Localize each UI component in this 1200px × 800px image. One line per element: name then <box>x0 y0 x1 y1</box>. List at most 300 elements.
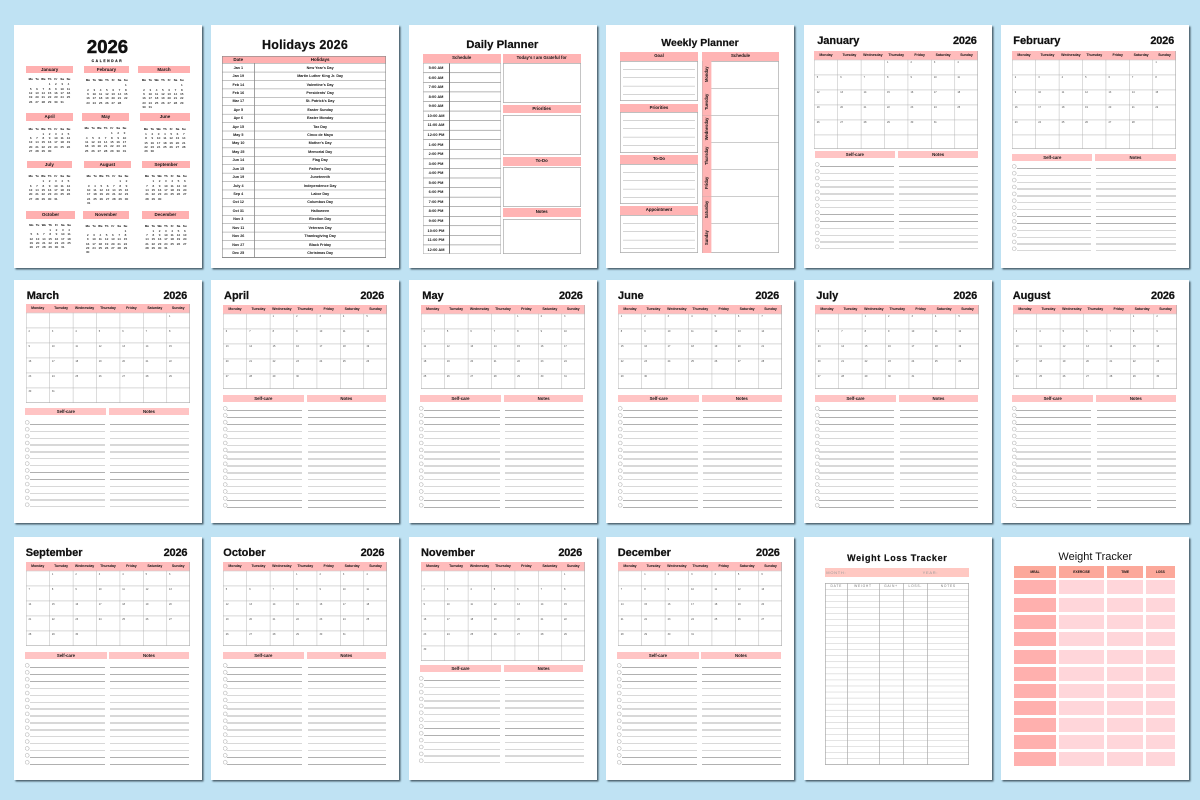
calendar grid: 7 <box>249 330 251 333</box>
calendar grid: 20 <box>1086 360 1089 363</box>
mini calendar: January: 11 <box>67 87 70 91</box>
column label: gain: GAIN+ <box>884 584 898 588</box>
mini calendar: June: Su <box>182 127 186 131</box>
calendar grid: 13 <box>840 91 843 94</box>
calendar grid: 12 <box>714 330 717 333</box>
calendar grid: 20 <box>226 360 229 363</box>
mini calendar: December: Tu <box>152 224 155 228</box>
mini calendar: October: Tu <box>36 223 39 227</box>
mini calendar: July: 24 <box>54 192 58 196</box>
calendar grid: 23 <box>1015 121 1018 124</box>
mini calendar: April: We <box>41 126 45 130</box>
mini calendar: May: 31 <box>123 149 126 153</box>
table: holidays list: Holidays <box>311 57 330 62</box>
calendar grid: 3 <box>1016 330 1017 333</box>
month label: March: March <box>157 67 171 72</box>
section header: priorities <box>620 104 698 112</box>
calendar grid: 26 <box>1063 375 1065 378</box>
calendar grid: 27 <box>169 618 172 621</box>
month label: February: February <box>97 67 116 72</box>
mini calendar: February: We <box>98 78 103 82</box>
mini calendar: November: 17 <box>92 242 96 246</box>
mini calendar: May: 21 <box>104 144 107 148</box>
calendar grid: Monday <box>31 564 44 568</box>
month and year bar: MONTH: <box>826 570 846 575</box>
mini calendar: January: Tu <box>35 77 39 81</box>
calendar grid: 8 <box>1155 76 1157 79</box>
mini calendar: November: 29 <box>124 246 127 250</box>
mini calendar: December: 31 <box>164 246 168 250</box>
calendar grid: 12 <box>146 588 148 591</box>
mini calendar: March: Mo <box>142 78 146 82</box>
calendar grid: Saturday <box>1135 307 1150 311</box>
mini calendar: August: 28 <box>112 197 116 201</box>
column label: loss: LOSS- <box>908 584 922 588</box>
day label: Sunday <box>702 223 712 253</box>
mini calendar: November: Fr <box>111 224 114 228</box>
section header: self-care: Self-care <box>57 409 75 414</box>
year: 2026 <box>755 290 779 302</box>
calendar grid: 18 <box>75 360 78 363</box>
table: holidays list: Martin Luther King Jr. Day <box>297 74 343 78</box>
mini calendar: September: 2 <box>159 179 160 183</box>
month label: July <box>27 161 72 168</box>
mini calendar: October: 3 <box>62 228 64 232</box>
calendar grid: 28 <box>841 375 844 378</box>
calendar grid: 20 <box>169 603 172 606</box>
mini calendar: August: 1 <box>119 179 121 183</box>
mini calendar: September: Th <box>164 174 168 178</box>
mini calendar: January: Sa <box>60 77 64 81</box>
month title: February <box>1013 35 1060 47</box>
calendar grid: 7 <box>273 588 274 591</box>
calendar grid: Saturday <box>936 53 951 57</box>
month label: June <box>140 113 190 121</box>
calendar grid: 16 <box>296 345 299 348</box>
mini calendar: January: 22 <box>48 95 51 99</box>
calendar grid: 25 <box>691 360 694 363</box>
calendar grid: 27 <box>470 375 473 378</box>
mini calendar: October: We <box>42 223 46 227</box>
calendar grid: 29 <box>564 633 567 636</box>
calendar grid: 31 <box>343 633 346 636</box>
mini calendar: August: Fr <box>112 174 115 178</box>
mini calendar: February: 21 <box>118 96 121 100</box>
mini calendar: April: 4 <box>61 132 63 136</box>
month label: November: November <box>95 212 117 217</box>
mini calendar: November: 12 <box>105 237 108 241</box>
mini calendar: April: 21 <box>35 145 39 149</box>
mini calendar: June: Fr <box>170 127 173 131</box>
calendar grid <box>814 51 978 149</box>
mini calendar: July: 22 <box>42 192 45 196</box>
calendar grid: Thursday <box>692 307 708 311</box>
mini calendar: September: 5 <box>178 179 179 183</box>
calendar grid: 23 <box>888 360 891 363</box>
mini calendar: January: 10 <box>60 87 64 91</box>
calendar grid: 15 <box>273 345 275 348</box>
section header: self-care <box>815 151 895 158</box>
mini calendar: March: 25 <box>155 101 158 105</box>
mini calendar: October: 1 <box>49 228 51 232</box>
mini calendar: March: 12 <box>161 92 165 96</box>
mini calendar: November: 4 <box>99 233 101 237</box>
calendar grid: Wednesday <box>272 564 292 568</box>
section header: notes <box>899 395 978 402</box>
table: holidays list <box>222 56 386 258</box>
mini calendar: November: Th <box>105 224 108 228</box>
mini calendar: January <box>28 77 70 104</box>
mini calendar: July: Tu <box>35 174 39 178</box>
mini calendar: July: 1 <box>42 179 44 183</box>
mini calendar: October: 29 <box>48 245 52 249</box>
calendar grid: 13 <box>1086 345 1089 348</box>
mini calendar: October: Mo <box>29 223 33 227</box>
calendar grid: 1 <box>887 61 888 64</box>
mini calendar: November: 28 <box>118 246 121 250</box>
mini calendar: November: Mo <box>86 224 90 228</box>
mini calendar: February: 14 <box>118 92 121 96</box>
calendar grid: 9 <box>296 330 297 333</box>
calendar grid: 20 <box>517 618 520 621</box>
calendar grid: 2 <box>319 573 321 576</box>
mini calendar: July: 28 <box>35 197 39 201</box>
mini calendar: January: 3 <box>61 82 63 86</box>
mini calendar: August: 25 <box>93 197 97 201</box>
mini calendar: June: 20 <box>176 141 179 145</box>
mini calendar: April: 15 <box>42 140 45 144</box>
calendar grid: 25 <box>957 106 960 109</box>
table: holidays list: Flag Day <box>312 158 328 162</box>
mini calendar: October: 23 <box>55 241 58 245</box>
mini calendar: May: 1 <box>111 131 113 135</box>
section header: notes <box>109 408 189 415</box>
month and year bar: YEAR: <box>923 570 938 575</box>
calendar grid: 16 <box>668 603 670 606</box>
mini calendar: March: 29 <box>180 101 183 105</box>
mini calendar: June: 16 <box>151 141 154 145</box>
calendar grid: 25 <box>935 360 938 363</box>
month label: September: September <box>154 162 178 167</box>
calendar grid: 20 <box>249 618 252 621</box>
calendar grid: 27 <box>517 633 520 636</box>
mini calendar: March: 13 <box>168 92 171 96</box>
calendar grid: Monday <box>228 307 242 311</box>
section header: self-care <box>420 665 501 672</box>
calendar grid: 26 <box>99 375 102 378</box>
calendar grid: 21 <box>146 360 148 363</box>
mini calendar: December: 8 <box>152 233 154 237</box>
calendar grid: 22 <box>169 360 172 363</box>
mini calendar: April: 7 <box>36 136 38 140</box>
calendar grid: 21 <box>494 360 497 363</box>
mini calendar: June: 22 <box>144 145 148 149</box>
mini calendar: August: 14 <box>112 188 116 192</box>
mini calendar: December: 30 <box>158 246 161 250</box>
notes lines <box>505 404 584 508</box>
month and year bar <box>825 568 969 577</box>
column header: time <box>1107 566 1143 578</box>
mini calendar: August: 9 <box>126 184 127 188</box>
year: 2026 <box>558 547 582 559</box>
calendar grid: Thursday <box>297 307 313 311</box>
mini calendar: December: 19 <box>177 237 180 241</box>
calendar grid: 1 <box>865 315 866 318</box>
calendar grid: 4 <box>1039 330 1041 333</box>
schedule time rows: 4:00 PM <box>429 170 443 175</box>
notes lines <box>110 418 189 507</box>
calendar grid: 5 <box>714 315 716 318</box>
mini calendar: July <box>28 174 70 201</box>
mini calendar: September: 27 <box>183 192 186 196</box>
calendar grid: 6 <box>738 315 739 318</box>
mini calendar: April: Mo <box>29 126 33 130</box>
calendar grid: Monday <box>426 307 439 311</box>
section header: notes: Notes <box>1130 396 1142 401</box>
section header: notes <box>109 652 189 659</box>
mini calendar: May: 15 <box>110 140 114 144</box>
mini calendar: December: 17 <box>164 237 168 241</box>
mini calendar: February: 17 <box>93 96 96 100</box>
mini calendar: October: 9 <box>56 232 57 236</box>
mini calendar: September: 26 <box>177 192 180 196</box>
section header: notes: Notes <box>340 396 352 401</box>
year: 2026 <box>163 290 187 302</box>
calendar grid: Monday <box>228 564 242 568</box>
calendar grid: 17 <box>99 603 102 606</box>
calendar grid: 24 <box>99 618 102 621</box>
mini calendar: February: 12 <box>105 92 109 96</box>
mini calendar: May: 2 <box>117 131 119 135</box>
calendar grid <box>618 562 782 646</box>
section header: notes <box>1095 154 1176 161</box>
calendar grid: 25 <box>470 633 473 636</box>
calendar grid: 1 <box>621 315 622 318</box>
section header: notes: Notes <box>536 209 548 214</box>
table: holidays list: Easter Monday <box>307 116 333 120</box>
mini calendar: April: Fr <box>54 126 57 130</box>
mini calendar: September: Tu <box>152 174 155 178</box>
table: holidays list: St. Patrick's Day <box>306 99 335 103</box>
calendar grid: 17 <box>319 345 322 348</box>
mini calendar: March: 19 <box>161 96 165 100</box>
section header: grateful: Today's I am Grateful for <box>517 55 567 60</box>
calendar grid: 8 <box>865 330 866 333</box>
calendar grid: Friday <box>521 307 532 311</box>
calendar grid: 7 <box>541 588 542 591</box>
calendar grid <box>26 562 190 646</box>
calendar grid <box>1012 51 1176 149</box>
column label: weight: WEIGHT <box>854 584 872 588</box>
mini calendar: December: 22 <box>152 242 155 246</box>
calendar grid: 12 <box>99 345 102 348</box>
calendar grid: 30 <box>644 375 647 378</box>
mini calendar: June: 30 <box>151 149 154 153</box>
mini calendar: January: 31 <box>60 100 64 104</box>
calendar grid: 12 <box>738 588 741 591</box>
calendar grid: Wednesday <box>864 307 884 311</box>
calendar grid: 27 <box>761 618 764 621</box>
calendar grid: 21 <box>864 106 866 109</box>
mini calendar: January: 6 <box>36 87 38 91</box>
calendar grid: 15 <box>621 345 624 348</box>
section header: self-care <box>1012 395 1093 402</box>
calendar grid: 5 <box>958 315 960 318</box>
calendar grid: 13 <box>169 588 172 591</box>
mini calendar: October: 15 <box>48 237 52 241</box>
mini calendar: January: 1 <box>49 82 50 86</box>
table: holidays list: Thanksgiving Day <box>304 234 336 238</box>
year: 2026 <box>953 35 977 47</box>
mini calendar: April: 2 <box>49 132 50 136</box>
mini calendar: August: 23 <box>125 192 128 196</box>
mini calendar: December: 15 <box>152 237 155 241</box>
mini calendar: June: 2 <box>151 132 153 136</box>
mini calendar: December: 24 <box>164 242 168 246</box>
mini calendar: November: 25 <box>99 246 102 250</box>
calendar grid: 19 <box>714 345 717 348</box>
schedule time rows: 5:00 PM <box>429 180 443 185</box>
table: holidays list: Independence Day <box>304 184 336 188</box>
mini calendar: June: 28 <box>182 145 185 149</box>
calendar grid: 7 <box>864 76 865 79</box>
mini calendar: February: 23 <box>86 101 90 105</box>
calendar grid: 25 <box>714 618 717 621</box>
section header: appointment <box>620 206 698 215</box>
mini calendar: November: 5 <box>106 233 107 237</box>
calendar grid: 7 <box>841 330 843 333</box>
calendar grid <box>223 562 387 646</box>
mini calendar: August: 29 <box>118 197 122 201</box>
calendar grid: 9 <box>1156 330 1158 333</box>
mini calendar: March: 7 <box>175 88 176 92</box>
calendar grid: Tuesday <box>251 307 265 311</box>
calendar grid: 2 <box>1156 315 1158 318</box>
mini calendar: November: 30 <box>86 250 89 254</box>
section header: notes <box>1096 395 1176 402</box>
box: notes <box>503 219 581 254</box>
column label: notes: NOTES <box>941 584 956 588</box>
mini calendar: July: 4 <box>61 179 63 183</box>
schedule time rows: 11:00 PM <box>428 237 444 242</box>
month title: September <box>26 547 83 559</box>
calendar grid: 11 <box>470 603 473 606</box>
calendar grid: Thursday <box>889 307 905 311</box>
mini calendar: October: 7 <box>43 232 45 236</box>
mini calendar: August: Tu <box>93 174 97 178</box>
calendar grid: 8 <box>273 330 274 333</box>
calendar grid: 1 <box>564 573 565 576</box>
calendar grid: 16 <box>541 345 543 348</box>
calendar grid: 18 <box>957 91 960 94</box>
calendar grid: 22 <box>644 618 647 621</box>
calendar grid: 21 <box>28 618 31 621</box>
month title: June <box>618 290 644 302</box>
mini calendar: January: 18 <box>67 91 70 95</box>
calendar grid: 20 <box>840 106 843 109</box>
table: holidays list: Dec 25 <box>232 251 244 255</box>
mini calendar: April: 29 <box>42 149 45 153</box>
calendar grid: 24 <box>911 360 914 363</box>
calendar grid: 6 <box>1086 330 1087 333</box>
mini calendar: July: 31 <box>54 197 58 201</box>
mini calendar: January: 19 <box>29 95 32 99</box>
calendar grid: 24 <box>1038 121 1041 124</box>
calendar grid: 3 <box>447 588 448 591</box>
calendar grid: Tuesday <box>251 564 265 568</box>
section header: to-do: To-Do <box>653 156 665 161</box>
calendar grid: 15 <box>1155 91 1158 94</box>
mini calendar: March: 2 <box>143 88 145 92</box>
mini calendar: March: 16 <box>142 96 146 100</box>
self-care checklist <box>223 661 303 765</box>
mini calendar: September: 25 <box>170 192 174 196</box>
calendar grid: 12 <box>1085 91 1088 94</box>
table grid <box>825 583 969 765</box>
mini calendar: March: 5 <box>162 88 164 92</box>
mini calendar: March: 8 <box>181 88 183 92</box>
calendar grid: 8 <box>296 588 297 591</box>
calendar grid: 16 <box>910 91 913 94</box>
calendar grid: 13 <box>249 603 252 606</box>
calendar grid: 24 <box>564 360 567 363</box>
self-care checklist <box>223 404 303 508</box>
calendar grid: 25 <box>1039 375 1042 378</box>
mini calendar: October: Fr <box>55 223 58 227</box>
calendar grid: 1 <box>273 315 274 318</box>
calendar grid: 30 <box>541 375 543 378</box>
mini calendar: December: 10 <box>164 233 168 237</box>
mini calendar: March: 28 <box>174 101 177 105</box>
mini calendar: July: 14 <box>35 188 39 192</box>
section header: self-care: Self-care <box>650 396 668 401</box>
calendar grid: 20 <box>761 603 764 606</box>
calendar grid: 23 <box>296 360 299 363</box>
calendar grid: 5 <box>1085 76 1086 79</box>
calendar grid: Wednesday <box>75 564 94 568</box>
calendar grid: 9 <box>28 345 30 348</box>
calendar grid: 24 <box>934 106 937 109</box>
mini calendar: January: 13 <box>35 91 39 95</box>
mini calendar: August: 26 <box>100 197 103 201</box>
mini calendar: March <box>142 78 184 109</box>
mini calendar: May: 22 <box>110 144 114 148</box>
mini calendar: December: Sa <box>177 224 180 228</box>
mini calendar: July: 8 <box>42 184 44 188</box>
mini calendar: February: 6 <box>112 88 114 92</box>
calendar grid: 6 <box>122 330 124 333</box>
calendar grid: 2 <box>910 61 912 64</box>
mini calendar: October: 2 <box>56 228 57 232</box>
mini calendar: September: 7 <box>146 184 148 188</box>
calendar grid: 8 <box>517 330 519 333</box>
self-care checklist <box>25 418 105 507</box>
calendar grid: 25 <box>423 375 426 378</box>
mini calendar: September: 4 <box>171 179 173 183</box>
mini calendar: February: 24 <box>93 101 96 105</box>
calendar grid: 9 <box>423 603 425 606</box>
calendar grid: Monday <box>623 307 637 311</box>
mini calendar: August: Su <box>125 174 128 178</box>
table: holidays list: Mar 17 <box>232 99 244 103</box>
column header: loss <box>1146 566 1175 578</box>
calendar grid: 26 <box>714 360 717 363</box>
section header: self-care <box>223 652 304 659</box>
mini calendar: May: 14 <box>104 140 107 144</box>
calendar grid: 10 <box>691 588 694 591</box>
mini calendar: March: 30 <box>142 105 146 109</box>
mini calendar: May: Fr <box>110 126 113 130</box>
